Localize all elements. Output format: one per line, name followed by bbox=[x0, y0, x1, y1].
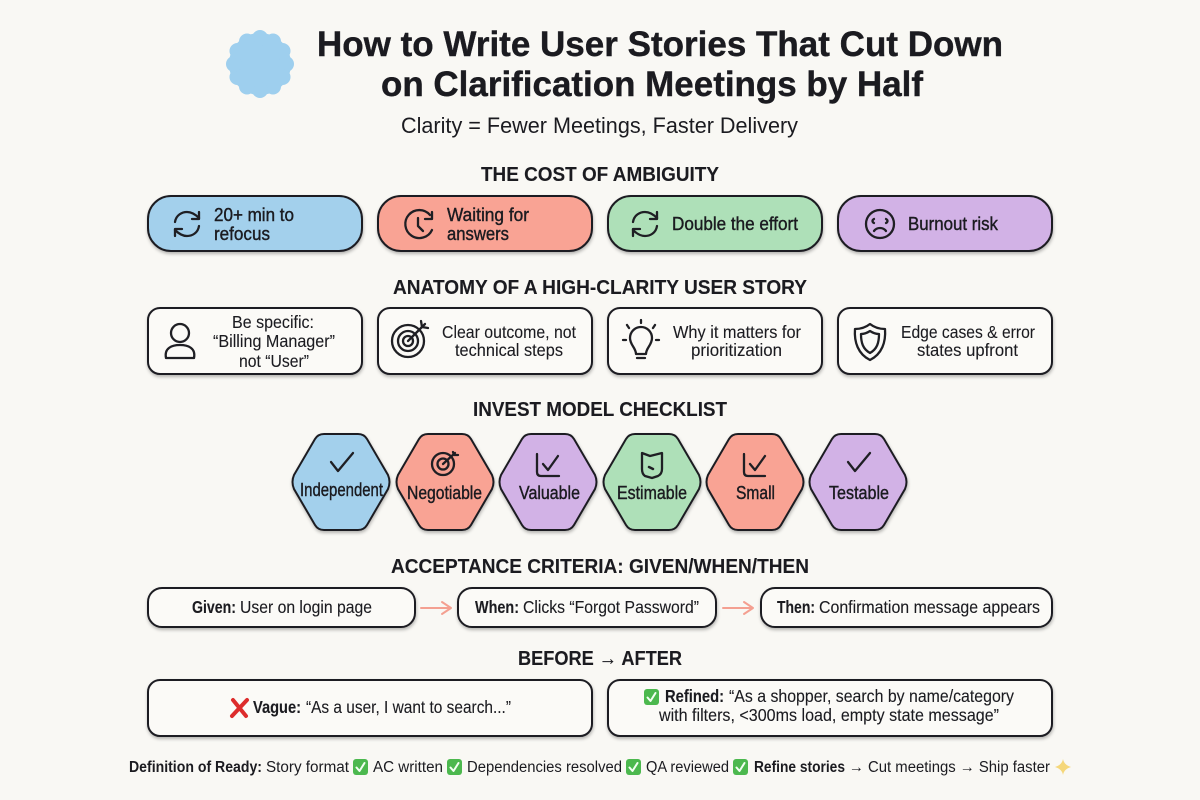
icon: check one bbox=[353, 759, 368, 775]
icon: person bbox=[166, 324, 194, 358]
hexagon: testable bbox=[810, 434, 906, 530]
icon: red cross bbox=[232, 700, 247, 716]
footer: definition of ready: → Cut meetings → Ship faster bbox=[849, 759, 1050, 776]
icon: check two bbox=[447, 759, 462, 775]
panel: cost of ambiguity cards bbox=[148, 196, 1052, 251]
heading: invest model checklist: INVEST MODEL CHECKLIST bbox=[473, 398, 727, 421]
card: why it matters bbox=[608, 308, 822, 374]
card: double the effort: Double the effort bbox=[672, 214, 798, 234]
step: then: Then: bbox=[777, 597, 815, 617]
hexagon: valuable: Valuable bbox=[519, 483, 580, 503]
icon: check bbox=[331, 453, 353, 471]
icon: light bulb bbox=[623, 320, 659, 358]
card: refined example: “As a shopper, search by name/category bbox=[729, 686, 1014, 706]
card: clear outcome: Clear outcome, not bbox=[442, 322, 576, 342]
card: be specific bbox=[148, 308, 362, 374]
icon: check bbox=[848, 453, 870, 471]
card: vague example: “As a user, I want to search...” bbox=[306, 697, 511, 717]
card: burnout risk: Burnout risk bbox=[908, 214, 999, 234]
icon: document shield bbox=[642, 453, 662, 478]
heading: the cost of ambiguity: THE COST OF AMBIGUITY bbox=[481, 163, 719, 186]
hexagon: independent bbox=[292, 434, 390, 530]
icon: check four bbox=[733, 759, 748, 775]
hexagon: estimable bbox=[604, 434, 700, 530]
icon: clock with arrow bbox=[405, 210, 432, 238]
arrow: when to then bbox=[723, 602, 753, 614]
card: be specific: “Billing Manager” bbox=[213, 331, 335, 351]
card: waiting for answers bbox=[378, 196, 592, 251]
card: clear outcome: technical steps bbox=[455, 340, 563, 360]
footer: definition of ready: AC written bbox=[373, 759, 443, 776]
card: vague example bbox=[148, 680, 592, 736]
footer: definition of ready: Dependencies resolved bbox=[467, 759, 622, 776]
card: clear outcome bbox=[378, 308, 592, 374]
icon: chart check bbox=[537, 454, 559, 476]
card: burnout risk bbox=[838, 196, 1052, 251]
step: when bbox=[458, 588, 716, 627]
card: vague example: Vague: bbox=[253, 697, 301, 717]
icon: sad face bbox=[866, 210, 894, 238]
title: How to Write User Stories That Cut Down bbox=[317, 25, 1003, 64]
hexagon: negotiable: Negotiable bbox=[407, 483, 482, 503]
card: refined example bbox=[608, 680, 1052, 736]
step: given bbox=[148, 588, 415, 627]
hexagon: small: Small bbox=[736, 483, 775, 503]
hexagon: small bbox=[706, 434, 804, 530]
step: then bbox=[761, 588, 1052, 627]
panel: invest hexagons bbox=[292, 434, 906, 530]
icon: refresh arrows bbox=[633, 212, 657, 236]
card: refined example: with filters, <300ms load, empty state message” bbox=[658, 705, 999, 725]
hexagon: testable: Testable bbox=[829, 483, 889, 503]
icon: scalloped blue badge bbox=[226, 30, 294, 98]
icon: sparkle bbox=[1055, 759, 1071, 775]
subtitle: Clarity = Fewer Meetings, Faster Delivery bbox=[401, 113, 798, 138]
panel: anatomy cards bbox=[148, 308, 1052, 374]
card: be specific: not “User” bbox=[239, 351, 309, 371]
card: be specific: Be specific: bbox=[232, 312, 314, 332]
title: on Clarification Meetings by Half bbox=[381, 65, 923, 104]
icon: refresh arrows bbox=[175, 212, 199, 236]
panel: before and after examples bbox=[148, 680, 1052, 736]
hexagon: negotiable bbox=[396, 434, 494, 530]
step: when: Clicks “Forgot Password” bbox=[523, 597, 699, 617]
card: double the effort bbox=[608, 196, 822, 251]
step: then: Confirmation message appears bbox=[819, 597, 1040, 617]
icon: target bbox=[392, 321, 428, 357]
heading: acceptance criteria: ACCEPTANCE CRITERIA: GIVEN/WHEN/THEN bbox=[391, 555, 809, 578]
footer: definition of ready: Refine stories bbox=[754, 759, 845, 776]
card: 20+ min to refocus: 20+ min to bbox=[214, 205, 294, 225]
card: edge cases: Edge cases & error bbox=[901, 322, 1035, 342]
card: why it matters: Why it matters for bbox=[673, 322, 801, 342]
footer: definition of ready: QA reviewed bbox=[646, 759, 729, 776]
icon: check three bbox=[626, 759, 641, 775]
card: edge cases: states upfront bbox=[917, 340, 1018, 360]
hexagon: estimable: Estimable bbox=[617, 483, 687, 503]
step: given: User on login page bbox=[240, 597, 372, 617]
step: when: When: bbox=[475, 597, 519, 617]
icon: shield bbox=[855, 324, 885, 360]
title bbox=[317, 25, 1003, 104]
footer: definition of ready: Definition of Ready: bbox=[129, 759, 262, 776]
panel: given when then flow bbox=[148, 588, 1052, 627]
card: why it matters: prioritization bbox=[691, 340, 782, 360]
card: 20+ min to refocus bbox=[148, 196, 362, 251]
hexagon: valuable bbox=[500, 434, 596, 530]
footer: definition of ready: Story format bbox=[266, 759, 350, 776]
icon: green check bbox=[644, 689, 659, 705]
card: waiting for answers: answers bbox=[447, 224, 509, 244]
hexagon: independent: Independent bbox=[300, 480, 383, 500]
card: 20+ min to refocus: refocus bbox=[214, 224, 270, 244]
step: given: Given: bbox=[192, 597, 236, 617]
icon: chart check bbox=[744, 454, 765, 476]
icon: target bbox=[432, 452, 458, 475]
card: refined example: Refined: bbox=[665, 686, 724, 706]
heading: before after: BEFORE → AFTER bbox=[518, 647, 682, 670]
footer: definition of ready bbox=[129, 759, 1071, 776]
card: edge cases bbox=[838, 308, 1052, 374]
card: waiting for answers: Waiting for bbox=[447, 205, 529, 225]
arrow: given to when bbox=[421, 602, 451, 614]
heading: anatomy: ANATOMY OF A HIGH-CLARITY USER STORY bbox=[393, 276, 807, 299]
